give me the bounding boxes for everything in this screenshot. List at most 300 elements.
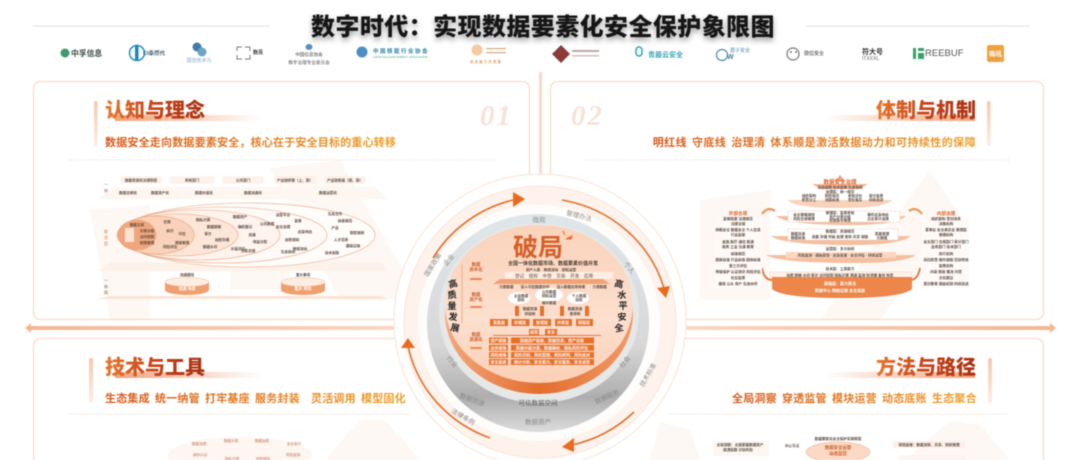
- hub clouds: 授权: [517, 297, 525, 302]
- subtitle: 灵活调用: [311, 391, 356, 405]
- icon: spark: [563, 231, 572, 239]
- left ladder: 数据资产化: 数据: [472, 291, 481, 298]
- ellipse labels: 人才培养: [334, 237, 349, 242]
- cylinder: right: 重大 风险: [294, 285, 312, 291]
- hub block labels: 供给侧: [525, 311, 536, 316]
- diagram: method framework: 数据要素化安全保护实践框架: [815, 436, 862, 441]
- subtitle: 模块运营: [832, 391, 877, 405]
- logo: 中国核能行业协会: 中国核能行业协会: [373, 47, 429, 55]
- ellipse labels: 可信: [178, 231, 186, 236]
- logo: 中孚信息: 中孚信息: [71, 48, 102, 58]
- tier 2: 管理层：监督考核: [826, 210, 855, 215]
- top labels: 产业链供需（上、游）: [277, 177, 313, 182]
- wing: left: 外部合规: [729, 210, 748, 217]
- heading: 认知与理念: [105, 98, 205, 122]
- hub row of five boxes: 处理层: [536, 319, 548, 325]
- tier 1: 组织架构: [802, 193, 817, 198]
- hub small box labels: 运营: [530, 328, 538, 334]
- top labels: 系统部门: [185, 177, 200, 182]
- tier 1: [788, 193, 892, 208]
- tier 2: 日志审计追溯: [867, 216, 889, 221]
- left ladder: 数据资源化: [469, 331, 483, 349]
- tier 5 base: 加密 脱敏 水印 审计 访问控制 隐私计算 溯源 监测 防泄漏 备份 恢复: [786, 272, 894, 278]
- wing: right: 监督机构: [939, 263, 954, 268]
- diagram: radial tool fan: 身份认证: [193, 452, 208, 457]
- ellipse labels: 生态协同: [281, 249, 296, 254]
- wing: left: 政务 工业 交通 教育: [722, 244, 754, 249]
- ring labels: 社会: [617, 353, 633, 370]
- subtitle: 服务封装: [255, 391, 300, 405]
- tier 2: 权限账号管理: [829, 218, 851, 222]
- arc arrow: bottom right: [562, 412, 634, 452]
- hub clouds: [508, 288, 589, 305]
- diagram: layered ellipses: [97, 177, 387, 299]
- ellipse labels: 运营平台: [276, 212, 291, 217]
- subtitle: 打牢基座: [205, 391, 250, 405]
- hub table: 数据资产底座、数据目录、资产台账: [520, 337, 584, 343]
- wing: left: 行业监管: [731, 232, 746, 237]
- side labels: 安: [104, 228, 108, 235]
- tier 1: 审计监督: [869, 193, 884, 198]
- diagram: radial tool fan: 数据加密: [255, 438, 270, 443]
- bottom plane: [97, 296, 387, 299]
- hub process band: [493, 272, 613, 284]
- heading underline glow: [825, 115, 975, 121]
- diagram: governance tower: [715, 175, 969, 298]
- logo: orange association: [470, 44, 506, 64]
- hub fine line: 力激数据 深入可信数据空间 深入数据应用场景 力激数据: [499, 284, 607, 289]
- cylinder: left: 流通 场景: [178, 285, 196, 291]
- label: 高质量发展: [447, 277, 460, 334]
- dotted divider: [585, 159, 1010, 161]
- hub clouds: 企业数据: [514, 293, 529, 298]
- logo: 中国信息协会: [288, 44, 330, 66]
- wing: right: 业务部门 技术部门: [931, 244, 961, 249]
- hub small box labels: 安全: [547, 328, 555, 334]
- logo: 数亮: [237, 47, 263, 59]
- diagram: radial tool fan: 风险监测: [286, 452, 301, 457]
- ellipse labels: 数据主权: [130, 222, 145, 227]
- wing: left: 社会监督: [731, 275, 746, 280]
- tier 3: 数据目录: [791, 231, 806, 236]
- logo: owl: 微信安全: [804, 50, 824, 57]
- side labels: 体: [104, 187, 109, 194]
- heading: 技术与工具: [105, 356, 205, 379]
- subtitle: 统一纳管: [155, 391, 200, 405]
- ring labels: 数据服务: [593, 387, 621, 406]
- top labels: [119, 177, 363, 195]
- tier 2: 安全策略规划: [793, 212, 815, 217]
- logo: 符大号: 符大号: [862, 47, 883, 56]
- logo: CI: CI泰然代: [143, 49, 166, 57]
- wing: right: 内审 稽核 整改 问责: [930, 269, 962, 274]
- heading accent bar: [987, 101, 990, 146]
- ring labels: 微观: [532, 215, 546, 224]
- wing: left: [715, 210, 762, 288]
- ellipse labels: 数据资产: [233, 214, 248, 219]
- panel: 体制与机制: [550, 82, 1044, 320]
- top labels: 数据资源化法律制度: [125, 177, 158, 182]
- wing: left: 监管政策 法律规范: [723, 216, 753, 221]
- hub table: 业务视角: [490, 344, 506, 350]
- hub blocks: data resources: [515, 306, 589, 316]
- logo: owl: [787, 48, 824, 60]
- ring labels: 技术标准: [637, 361, 658, 388]
- diagram: method framework: 中心节点: [785, 443, 800, 448]
- dotted divider: [668, 413, 1008, 415]
- heading underline glow: [825, 372, 975, 378]
- hub clouds: 个人数据: [572, 293, 587, 298]
- ellipse labels: 标识: [166, 228, 174, 233]
- wing: left: 标准规范: [731, 251, 746, 256]
- label: 高水平安全: 全: [613, 321, 624, 334]
- hub two small boxes: [529, 329, 557, 335]
- ellipse labels: 生态合作: [328, 211, 343, 216]
- tier 1: 职责分工: [802, 197, 817, 202]
- logo: FREEBUF: REEBUF: [925, 48, 964, 59]
- tier 5 base: 技术层：工具能力: [826, 266, 855, 271]
- tier 3: 数据标准: [791, 235, 806, 240]
- ellipse labels: 审计: [204, 231, 212, 236]
- ellipse labels: 数据水印: [203, 244, 218, 249]
- inner pale ring: [404, 186, 676, 458]
- tier 5 base: [762, 266, 920, 298]
- diagram: method framework: 全局洞察：全面掌握数据资产: [717, 442, 764, 447]
- ellipse labels: 分类分级: [140, 228, 155, 233]
- tier 3: 数据层：资源规范: [826, 228, 855, 234]
- subtitle: 生态集成: [105, 391, 150, 405]
- panel: 方法与路径: [550, 338, 1044, 460]
- hub block labels: [523, 306, 583, 316]
- center hub: [394, 174, 686, 460]
- ellipse labels: 流通: [248, 232, 256, 237]
- number 01: 01: [480, 100, 513, 132]
- tier 4: 风险监测 · 威胁发现 · 应急处置 · 安全评估 · 持续运营: [798, 252, 883, 258]
- wing: right: 执行机构: [939, 251, 954, 256]
- arrow: right to tower: [909, 209, 922, 214]
- hub table: 安全底座: [490, 358, 506, 364]
- ellipse labels: [125, 211, 365, 255]
- tower top title: 法治保障 技术监管 生态协同: [817, 184, 863, 190]
- subtitle: 生态聚合: [932, 391, 977, 405]
- tier 1: 持续改进: [869, 197, 884, 202]
- hub row of five boxes: 销毁层: [578, 319, 590, 325]
- vertical divider: [539, 72, 542, 190]
- ellipse labels: 公共数据: [260, 221, 275, 226]
- top labels: 数据合规化: [119, 190, 137, 195]
- ellipse labels: 权限管理: [140, 240, 155, 245]
- label: 高质量发展: 质: [447, 288, 457, 301]
- hub row of five boxes: 存储层: [514, 319, 526, 325]
- logo: 符大号: [862, 47, 883, 62]
- tier 2: 资产分类分级: [829, 214, 851, 219]
- wing: left: 媒体 公众 用户 生态伙伴: [719, 281, 758, 286]
- middle plane: [97, 262, 387, 271]
- ring labels: 数据资源: [458, 391, 486, 408]
- ellipse labels: 访问控制: [140, 234, 155, 239]
- logo: red diamond: [552, 45, 599, 63]
- side labels: 两: [104, 290, 108, 295]
- tier 5 base: 基础层：算力算法: [824, 280, 856, 286]
- grey disc inner shadow: [439, 223, 639, 403]
- hub table: 统计分析、安全能力、安全服务、安全运营: [514, 358, 590, 364]
- wing: right: 管理机构: [939, 232, 954, 237]
- heading accent bar: [94, 101, 98, 146]
- heading underline glow: [115, 115, 262, 121]
- wing: right: 组织架构 责任体系: [931, 216, 961, 221]
- hub row of five boxes: 采集层: [493, 319, 505, 325]
- label: 高质量发展: 展: [450, 322, 460, 334]
- hub subtitle: 全国一体化数据市场、数据要素价值开发: [508, 260, 598, 267]
- wing: left: 法律法规: [731, 221, 746, 226]
- logo: 国信: 国信技术元: [186, 57, 212, 64]
- diagram: method framework: [713, 436, 965, 460]
- side labels: 目: [104, 194, 108, 200]
- watermark shapes: [90, 160, 1010, 460]
- top labels: 公共部门: [236, 177, 251, 182]
- hub separator: [493, 334, 601, 337]
- subtitle: 模型固化: [361, 391, 406, 405]
- logo: 中国核能行业协会: [356, 46, 429, 59]
- dotted divider: [68, 159, 495, 161]
- subtitle: 动态底账: [882, 391, 927, 405]
- tier 2: 风险合规管理: [793, 216, 815, 221]
- side labels: [104, 182, 109, 295]
- logo: 青藤云安全: [636, 47, 683, 59]
- label: 高质量发展: 高: [447, 277, 459, 290]
- side labels: 一: [104, 278, 108, 283]
- tier 3: 质量管理: [875, 231, 890, 236]
- wing: left: 金融 医疗 通信 能源: [722, 239, 754, 244]
- ellipse labels: 跨境流动: [293, 246, 308, 251]
- dotted divider: [68, 413, 410, 415]
- heading: 体制与机制: [876, 99, 976, 122]
- ellipse labels: 应急响应: [298, 229, 313, 234]
- tier 1: 考核评价: [848, 193, 863, 198]
- label: 高质量发展: 发: [448, 311, 458, 322]
- hub table: [489, 337, 594, 365]
- left ladder: 数据资产化: [469, 291, 483, 308]
- wing: right: 意识教育 激励机制 持续改进: [923, 281, 969, 286]
- wing: right: [922, 210, 969, 288]
- disc side orange: [445, 232, 633, 394]
- wing: right: 安全部门 合规部门 审计部门: [923, 239, 969, 244]
- logo: QW: [716, 47, 750, 61]
- subtitle: 穿透监管: [782, 391, 827, 405]
- left ladder: 数据资本化: 资本化: [469, 266, 483, 273]
- ring labels: 法律条例: [450, 406, 477, 427]
- logo: 数亮: 数亮: [253, 49, 263, 56]
- logo: 中国核能行业协会: CHINA NUCLEAR ENERGY ASSOCIATION: [373, 55, 428, 59]
- ellipse labels: 加密存储: [215, 237, 230, 242]
- top labels: 产业链各端（游、游）: [327, 177, 363, 182]
- logo row: [60, 42, 1004, 66]
- tower top title: 数据安全治理: [823, 178, 857, 186]
- ring labels: 个人: [622, 260, 637, 276]
- label: 高水平安全: 水: [617, 288, 627, 301]
- side labels: 全: [104, 234, 109, 240]
- horizontal double arrow: [25, 323, 1056, 333]
- top labels: 数据流通化: [244, 190, 262, 195]
- ladder axis: [461, 265, 463, 323]
- hub table: 风险视角: [490, 352, 506, 358]
- tier 1: 责任落实: [848, 197, 863, 202]
- top plane: [97, 187, 387, 199]
- tower top title: [812, 175, 868, 194]
- hub row of five boxes: [490, 319, 593, 326]
- diagram: radial tool fan: [168, 437, 312, 460]
- wing: left: 等级保护 认证测评 风险评估: [715, 269, 761, 274]
- wing: right: 决策机构: [939, 221, 954, 226]
- ring labels: 行业: [445, 354, 460, 370]
- left ladder: 数据资本化: 数据: [472, 261, 481, 268]
- cylinder: left: 流通路径: [180, 272, 195, 277]
- hub table: 资产底账: [490, 337, 506, 343]
- wing: left: 网络安全 数据安全 个人信息: [715, 227, 761, 232]
- label: 高水平安全: 安: [617, 311, 627, 322]
- ellipse labels: 收益分配: [253, 239, 268, 244]
- arc arrow: top right: [562, 200, 670, 298]
- arc arrow: top left: [433, 192, 525, 258]
- ellipse labels: 隐私计算: [196, 217, 211, 222]
- label: 高水平安全: [613, 277, 628, 334]
- subtitle: 全局洞察: [732, 391, 777, 405]
- tier 2: 事件应急响应: [867, 212, 889, 217]
- top labels: 数据资产化: [151, 190, 169, 195]
- hub clouds: 城市数据: [542, 300, 557, 305]
- nested ellipses: [117, 203, 375, 267]
- diagram: radial tool fan: 安全审计: [287, 441, 302, 446]
- diagram: method framework: 摸清底数 识别风险: [723, 447, 753, 452]
- panel: 技术与工具: [34, 338, 530, 460]
- number 02: 02: [571, 100, 604, 132]
- logo: orange square: [987, 45, 1004, 62]
- top labels: 数据运营化: [319, 190, 337, 195]
- side labels: 目: [104, 241, 108, 247]
- top boxes: [121, 177, 365, 183]
- logo: CI: [130, 45, 166, 60]
- hub table: 数据分级分类、数据确权、隐私风险评估: [516, 344, 588, 350]
- subtitle: 数据安全走向数据要素安全，核心在于安全目标的重心转移: [105, 135, 396, 149]
- logo: QW: W: [727, 54, 734, 61]
- ring labels: 数据资产: [525, 417, 552, 426]
- tier 3: 采集 存储 传输 处理 使用 共享 销毁: [812, 234, 869, 239]
- label: 高水平安全: 平: [618, 301, 628, 311]
- left ladder: 数据资本化: [469, 261, 483, 280]
- disc face: [445, 225, 633, 383]
- tier 1: 流程标准: [825, 197, 840, 202]
- heading: 方法与路径: [876, 355, 976, 379]
- ellipse labels: 确权登记: [238, 224, 253, 229]
- cylinder: right: 重大事项: [296, 272, 311, 277]
- ring labels: 可信数据空间: [518, 398, 558, 407]
- subtitle: 明红线 守底线 治理清 体系顺是激活数据动力和可持续性的保障: [653, 135, 976, 149]
- hub clouds: 公共数据: [542, 289, 557, 294]
- arc arrow: bottom left: [401, 338, 490, 438]
- ring labels: [422, 208, 658, 427]
- label: 高水平安全: 高: [613, 277, 625, 290]
- left ladder: 数据资产化: 资产化: [469, 296, 483, 303]
- hub small box labels: [530, 328, 555, 334]
- wing: right: 文化建设: [939, 275, 954, 280]
- hub row of five boxes: 共享层: [557, 319, 569, 325]
- ring labels: 国家政策: [422, 251, 444, 278]
- grey disc: [427, 214, 649, 432]
- arrow: left to tower: [762, 209, 775, 214]
- hub block labels: 数据资源: [523, 306, 538, 311]
- side labels: 体: [104, 283, 109, 290]
- diagram: method framework: 数据安全运营: [825, 444, 852, 451]
- wing: right: 内部治理: [937, 210, 956, 217]
- cylinder: right: [281, 272, 325, 295]
- ellipse labels: 合规: [163, 219, 171, 224]
- ellipse labels: 态势感知: [285, 237, 300, 242]
- hub block labels: 需求侧: [570, 311, 581, 316]
- panel: 认知与理念: [34, 82, 530, 320]
- tier 2: [776, 210, 906, 225]
- ring labels: 企业: [441, 251, 457, 268]
- outer halo ring: [394, 174, 686, 460]
- wing: left: 第三方评估: [729, 263, 747, 268]
- logo: orange association: 安全能力共享委: [470, 59, 502, 64]
- tier 4: 运营层：多方协同: [826, 246, 855, 251]
- tier 3: 元数据: [877, 235, 888, 240]
- tier 3: [771, 228, 911, 245]
- logo: 中国信息协会: 数字治理专业委员会: [288, 59, 330, 66]
- tier 1: 制度规范: [825, 193, 840, 198]
- title rules: [33, 25, 1030, 27]
- hub clouds: 授权运营: [542, 293, 557, 298]
- top labels: 数据价值化: [195, 190, 213, 195]
- heading accent bar: [89, 358, 93, 403]
- title: 数字时代：实现数据要素化安全保护象限图: [311, 13, 775, 41]
- ellipse labels: 价值评估: [231, 246, 246, 251]
- ellipse labels: 数据脱敏: [207, 224, 222, 229]
- ellipse labels: 交易合规: [241, 248, 256, 253]
- ellipse labels: 标准规范: [338, 218, 353, 223]
- hub table: 风险识别、风险管理、风险研判、风险应对: [514, 352, 590, 358]
- tier 4: [766, 246, 916, 263]
- hub clouds: 授权: [575, 297, 583, 302]
- side labels: 一: [104, 182, 108, 187]
- diagram: radial tool fan: 数据分类: [224, 438, 239, 443]
- ellipse labels: 基础设施: [346, 243, 361, 248]
- ellipse labels: 风险评估: [163, 244, 178, 249]
- headline 破局: 破局: [513, 234, 563, 262]
- ellipse labels: 溯源管理: [175, 240, 190, 245]
- label: 高质量发展: 量: [447, 301, 457, 311]
- wing: right: 董事会 安全委员会 管理层: [925, 227, 967, 232]
- wing: right: 岗位职责 操作规程 培训考核: [923, 257, 969, 262]
- logo: 国信: [186, 42, 212, 64]
- diagram: method framework: 动态监管: [829, 450, 847, 457]
- ellipse labels: 技术创新: [325, 250, 340, 255]
- heading accent bar: [988, 358, 992, 403]
- diagram: method framework: 穿透监管：数据流转、共享、授权管理: [898, 442, 960, 447]
- left ladder: 数据资源化: 数据: [472, 331, 481, 338]
- hub block labels: 数据资源: [568, 306, 583, 311]
- wing: left: 国家标准 行业标准 团体标准: [715, 257, 761, 262]
- tower top title: 治理层：统一规范: [826, 189, 855, 194]
- logo: 符大号: ITXXXL: [862, 56, 879, 62]
- tier 5 base: 数据中心 网络设施 安全底座: [815, 287, 865, 293]
- hub tags: 资产入表 跨境流动 授权运营: [526, 267, 577, 272]
- logo: 中孚信息: [60, 48, 102, 58]
- ring labels: 管理办法: [565, 208, 593, 223]
- logo: orange square: 嘶吼: [989, 49, 1002, 58]
- left ladder: 数据资源化: 资源化: [469, 336, 483, 343]
- logo: QW: 君子安全: [730, 47, 750, 54]
